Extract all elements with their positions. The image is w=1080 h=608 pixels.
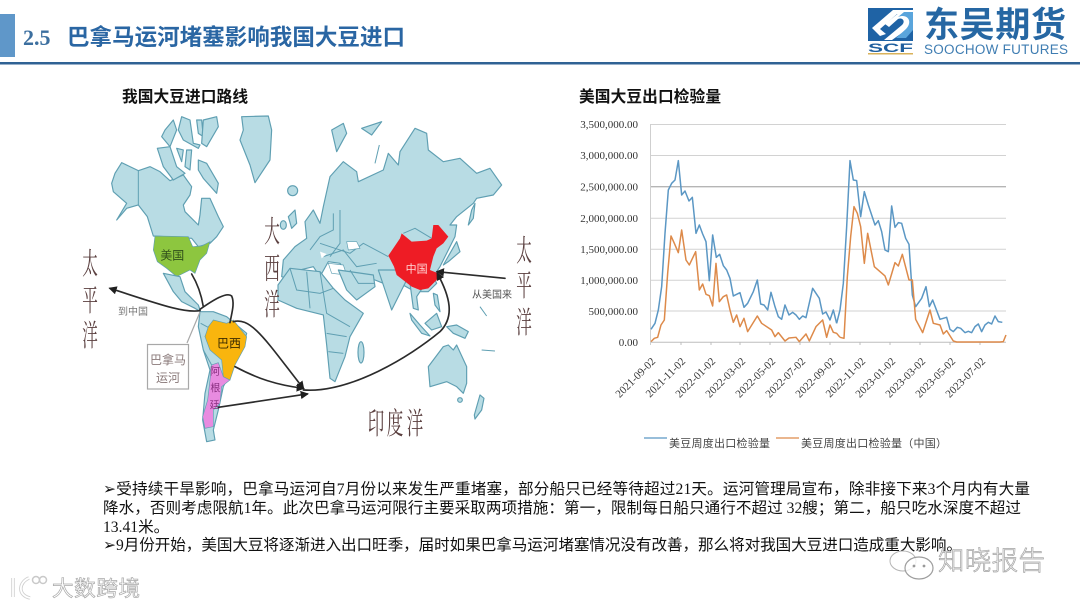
panel: world map with routes (82, 116, 532, 443)
y axis labels: 2,000,000.00 (580, 213, 638, 225)
y axis labels: 1,000,000.00 (580, 275, 638, 287)
ocean label: atlantic: 西 (264, 244, 280, 288)
usa: 美国 (160, 246, 184, 263)
x axis labels: 2021-11-02 (644, 356, 688, 400)
x axis labels: 2021-09-02 (613, 356, 658, 400)
africa, middle east, india, oceania (278, 268, 495, 419)
watermark: right: 知晓报告 (938, 539, 1045, 578)
ocean label: atlantic: 洋 (264, 280, 280, 324)
watermark: right (890, 539, 1045, 579)
y axis labels: 500,000.00 (588, 306, 638, 318)
ocean label: atlantic (264, 207, 280, 324)
route label: from usa: 从美国来 (472, 286, 512, 301)
ocean label: pacific left: 洋 (82, 311, 98, 355)
header rule (0, 62, 1080, 64)
australia (428, 345, 467, 393)
logo (868, 0, 1068, 57)
x axis labels: 2022-03-02 (703, 356, 748, 400)
ocean label: indian: 洋 (407, 399, 423, 443)
x axis labels: 2023-03-02 (883, 356, 928, 400)
series: inspections to China (651, 207, 1006, 342)
text block: analysis bullets (103, 479, 1030, 554)
text block: analysis bullets: 降水，否则考虑限航1年。此次巴拿马运河限行主要采取两项措施：第一，限制每日船只通行不超过 32艘；第二，船只吃水深度不超过 (103, 498, 1021, 517)
callout: panama canal: 运河 (156, 369, 180, 386)
header (0, 0, 1080, 64)
y axis labels: 2,500,000.00 (580, 182, 638, 194)
text block: analysis bullets: ➢受持续干旱影响，巴拿马运河自7月份以来发生严重堵塞，部分船只已经等待超过21天。运河管理局宣布，除非接下来3个月内有大量 (103, 479, 1030, 498)
greenland (240, 116, 272, 183)
y axis labels: 0.00 (619, 337, 638, 349)
x axis labels: 2023-05-02 (913, 356, 958, 400)
china: 中国 (406, 260, 428, 276)
south america: 根 (210, 380, 220, 395)
text block: analysis bullets: ➢9月份开始，美国大豆将逐渐进入出口旺季，届时如果巴拿马运河堵塞情况没有改善，那么将对我国大豆进口造成重大影响。 (103, 535, 962, 554)
x axis labels: 2023-01-02 (853, 356, 898, 400)
legend (644, 435, 947, 451)
y axis labels: 3,500,000.00 (580, 119, 638, 131)
x axis labels: 2022-05-02 (733, 356, 778, 400)
series: total US inspections (651, 161, 1002, 333)
china (388, 225, 448, 290)
title: 巴拿马运河堵塞影响我国大豆进口 (67, 20, 405, 52)
x axis labels: 2023-07-02 (943, 356, 988, 400)
ocean label: pacific left: 平 (82, 276, 98, 320)
section number: 2.5 (23, 25, 50, 50)
x axis labels: 2022-01-02 (673, 356, 718, 400)
title accent block (0, 14, 15, 57)
routes (110, 274, 307, 407)
ocean label: indian: 印 (368, 399, 384, 443)
x axis labels: 2022-07-02 (763, 356, 808, 400)
text block: analysis bullets: 13.41米。 (103, 518, 169, 536)
ocean label: pacific left: 太 (82, 239, 98, 283)
legend: 美豆周度出口检验量（中国） (801, 435, 947, 451)
callout: panama canal: 巴拿马 (150, 351, 186, 368)
logo: SOOCHOW FUTURES (924, 42, 1068, 57)
heading: chart: 美国大豆出口检验量 (579, 84, 721, 107)
y axis labels: 3,000,000.00 (580, 150, 638, 162)
north america (112, 116, 298, 247)
ocean label: pacific left (82, 239, 98, 355)
south america: 巴西 (217, 334, 241, 351)
south america: 阿 (210, 363, 220, 378)
eurasia (280, 122, 502, 292)
ocean label: atlantic: 大 (264, 207, 280, 251)
x axis labels: 2022-09-02 (793, 356, 838, 400)
ocean label: pacific right: 洋 (516, 298, 532, 342)
ocean label: pacific right: 平 (516, 261, 532, 305)
ocean label: indian (368, 399, 423, 443)
legend: 美豆周度出口检验量 (669, 435, 770, 451)
y axis labels: 1,500,000.00 (580, 244, 638, 256)
ocean label: pacific right (516, 226, 532, 342)
callout: panama canal (148, 312, 200, 389)
brazil (205, 320, 247, 380)
x axis labels: 2022-11-02 (824, 356, 868, 400)
watermark: left: 大数跨境 (52, 572, 140, 603)
chart: US soybean export inspections (580, 119, 1006, 451)
gridlines (650, 124, 1006, 345)
south america: 廷 (210, 396, 220, 411)
y axis labels (580, 119, 638, 349)
ocean label: indian: 度 (387, 399, 403, 443)
south america (163, 273, 247, 442)
logo: SCF (868, 41, 913, 55)
ocean label: pacific right: 太 (516, 226, 532, 270)
argentina (203, 363, 230, 428)
usa (153, 236, 210, 277)
heading: map: 我国大豆进口路线 (122, 84, 248, 107)
watermark: left (13, 572, 140, 603)
x axis labels (613, 356, 988, 400)
route label: to china: 到中国 (118, 303, 148, 318)
